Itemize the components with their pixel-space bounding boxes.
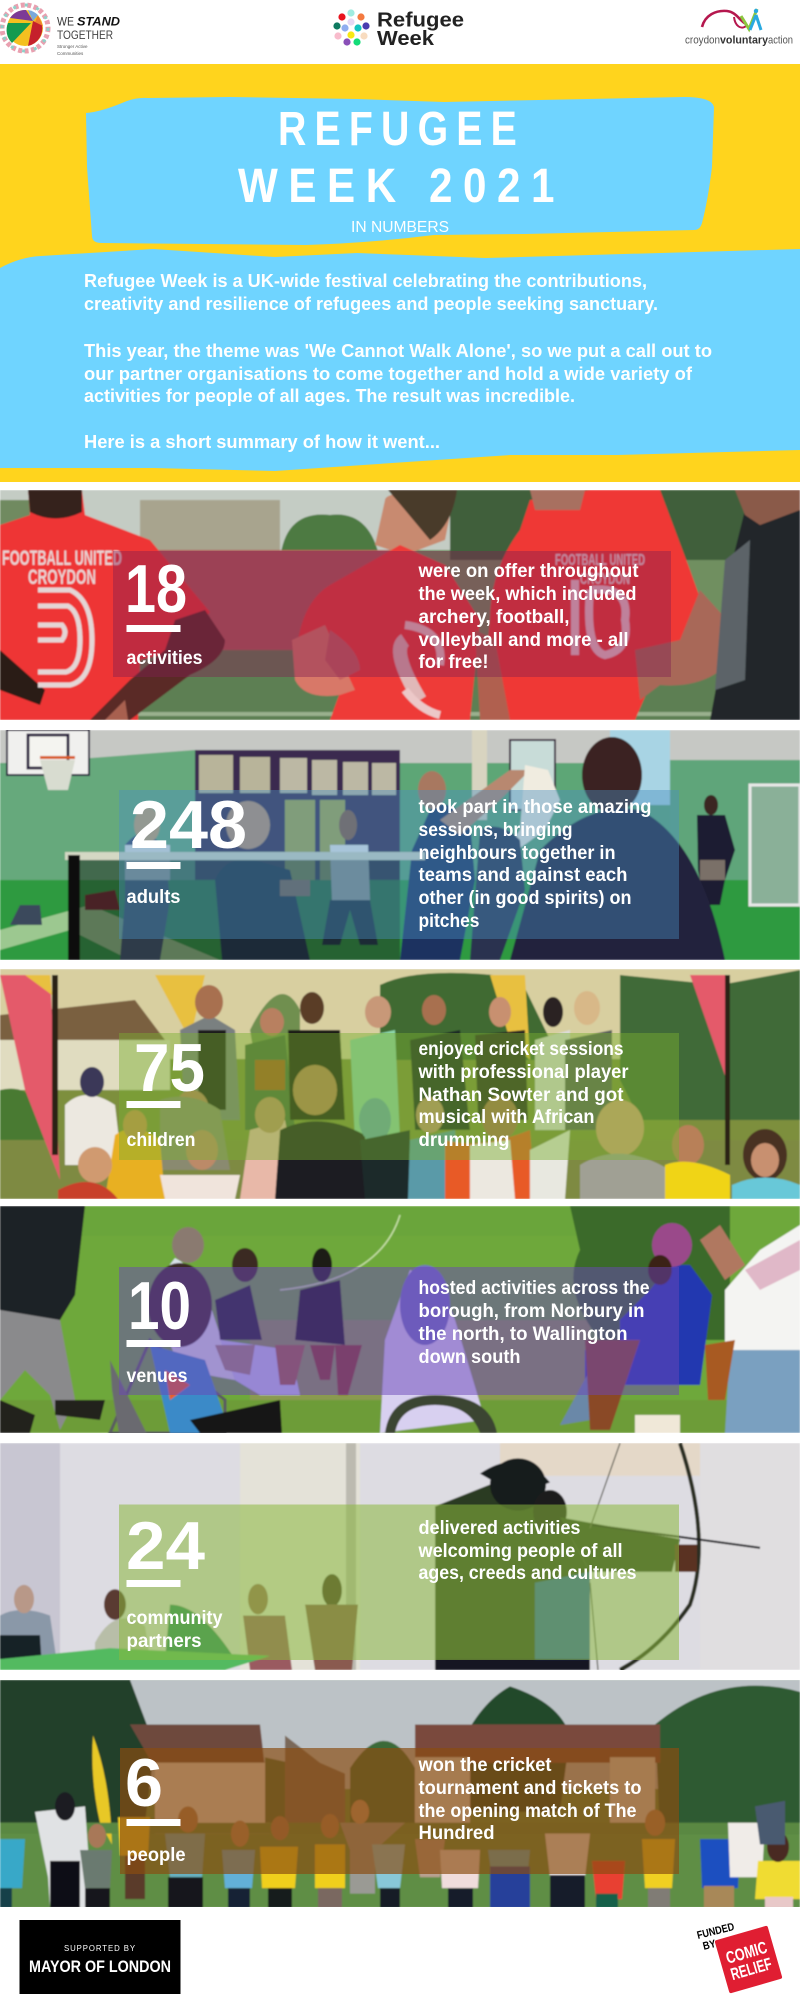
panel: yellow intro background: [0, 64, 800, 482]
logo: We Stand Together: Communities: [57, 51, 84, 56]
photo: footballers in red shirts: CROYDON: [580, 571, 630, 588]
stat number: 18: [125, 551, 187, 627]
stat label: partners: [126, 1631, 202, 1652]
underline bar: [126, 625, 180, 632]
colour overlay: [119, 1504, 679, 1660]
description: Nathan Sowter and got: [418, 1085, 624, 1106]
stat label: [126, 1608, 223, 1652]
logo: We Stand Together: STAND: [77, 16, 120, 28]
photo: African drumming on grass: [0, 1206, 800, 1440]
description: volleyball and more - all: [418, 630, 628, 651]
photo: footballers in red shirts: [0, 490, 800, 720]
logo: Croydon Voluntary Action: croydon: [685, 34, 720, 46]
underline bar: [126, 1819, 180, 1826]
stat number: 10: [128, 1268, 191, 1344]
colour overlay: [119, 1267, 679, 1395]
description: tournament and tickets to: [418, 1778, 642, 1799]
logo: We Stand Together: TOGETHER: [57, 28, 113, 42]
colour overlay: [119, 790, 679, 939]
panel: 248 adults: [0, 730, 800, 960]
description: [418, 797, 652, 932]
title: WEEK 2021: [238, 160, 565, 213]
description: won the cricket: [418, 1755, 552, 1776]
logo: Comic Relief: BY: [702, 1938, 718, 1953]
description: teams and against each: [418, 865, 628, 886]
intro text: our partner organisations to come together and hold a wide variety of: [84, 363, 693, 384]
stat label: activities: [126, 648, 202, 669]
photo: footballers in red shirts: FOOTBALL UNITED: [555, 552, 645, 569]
description: drumming: [418, 1130, 510, 1151]
logo: Refugee Week: Refugee: [377, 10, 464, 32]
title: [238, 103, 565, 213]
logo: Comic Relief: [696, 1921, 783, 1994]
description: down south: [418, 1347, 520, 1368]
description: hosted activities across the: [418, 1278, 650, 1299]
intro text: activities for people of all ages. The result was incredible.: [84, 385, 575, 406]
intro text: This year, the theme was 'We Cannot Walk Alone', so we put a call out to: [84, 340, 712, 361]
panel: 10 venues: [0, 1206, 800, 1440]
photo: children's cricket tournament: [0, 1680, 800, 1908]
panel: 24 community partners: [0, 1443, 800, 1670]
description: were on offer throughout: [418, 561, 639, 582]
logo: We Stand Together: [2, 5, 120, 56]
description: delivered activities: [418, 1518, 580, 1539]
logo: Croydon Voluntary Action: [685, 9, 793, 47]
description: with professional player: [418, 1062, 629, 1083]
underline bar: [126, 862, 180, 869]
colour overlay: [119, 1033, 679, 1160]
logo: We Stand Together: WE: [57, 16, 74, 28]
subtitle: IN NUMBERS: [351, 219, 449, 236]
description: the week, which included: [418, 584, 636, 605]
logo: Comic Relief: RELIEF: [728, 1954, 774, 1984]
description: took part in those amazing: [418, 797, 652, 818]
intro text: creativity and resilience of refugees and people seeking sanctuary.: [84, 293, 658, 314]
description: for free!: [418, 652, 488, 673]
description: archery, football,: [418, 607, 570, 628]
logo: Refugee Week: [333, 9, 464, 50]
description: the opening match of The: [418, 1801, 636, 1822]
description: borough, from Norbury in: [418, 1301, 644, 1322]
description: [418, 1039, 629, 1151]
title blob: [86, 97, 714, 245]
stat number: 24: [126, 1508, 205, 1584]
logo: We Stand Together: Stronger Active: [57, 44, 88, 49]
description: ages, creeds and cultures: [418, 1563, 636, 1584]
description: musical with African: [418, 1107, 594, 1128]
underline bar: [126, 1580, 180, 1587]
logo: Mayor of London: SUPPORTED BY: [64, 1943, 136, 1953]
intro text: [84, 270, 712, 452]
photo: group with cricket professional: [0, 969, 800, 1199]
title: REFUGEE: [278, 103, 525, 156]
stat number: 75: [134, 1030, 205, 1106]
panel: 18 activities: [0, 490, 800, 720]
logo: Refugee Week: Week: [377, 28, 435, 50]
photo: archery in a hall: [0, 1443, 800, 1670]
logo: Croydon Voluntary Action: action: [768, 34, 793, 46]
intro blob: [0, 249, 800, 471]
description: [418, 561, 639, 673]
description: welcoming people of all: [418, 1541, 622, 1562]
underline bar: [126, 1340, 180, 1347]
colour overlay: [113, 551, 671, 677]
description: other (in good spirits) on: [418, 888, 632, 909]
stat label: people: [126, 1845, 186, 1866]
panel: 6 people: [0, 1680, 800, 1908]
panel: 75 children: [0, 969, 800, 1199]
underline bar: [126, 1101, 180, 1108]
stat label: venues: [126, 1366, 188, 1387]
stat label: community: [126, 1608, 223, 1629]
logo: Mayor of London: MAYOR OF LONDON: [29, 1957, 171, 1976]
photo: volleyball in sports hall: [0, 730, 800, 960]
photo: footballers in red shirts: CROYDON: [28, 566, 96, 589]
intro text: Refugee Week is a UK-wide festival celebrating the contributions,: [84, 270, 647, 291]
logo: Comic Relief: COMIC: [724, 1938, 769, 1968]
description: neighbours together in: [418, 843, 616, 864]
description: enjoyed cricket sessions: [418, 1039, 624, 1060]
stat label: children: [126, 1130, 196, 1151]
description: pitches: [418, 911, 480, 932]
description: the north, to Wallington: [418, 1324, 628, 1345]
logo: Mayor of London: [20, 1920, 180, 1994]
stat number: 6: [125, 1745, 163, 1821]
description: Hundred: [418, 1823, 494, 1844]
colour overlay: [120, 1748, 679, 1874]
logo: Comic Relief: FUNDED: [696, 1921, 736, 1942]
description: [418, 1518, 636, 1584]
description: [418, 1278, 650, 1368]
logo: Croydon Voluntary Action: voluntary: [720, 34, 769, 46]
stat label: adults: [126, 887, 180, 908]
photo: footballers in red shirts: FOOTBALL UNITED: [2, 547, 122, 570]
stat number: 248: [130, 787, 247, 863]
description: [418, 1755, 642, 1844]
intro text: Here is a short summary of how it went...: [84, 431, 440, 452]
description: sessions, bringing: [418, 820, 572, 841]
